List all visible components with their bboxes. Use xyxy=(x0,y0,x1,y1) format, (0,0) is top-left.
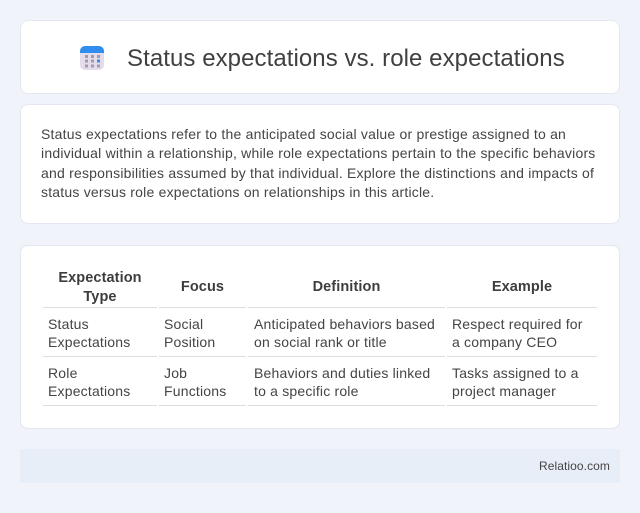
table row: status expectations: Status xyxy=(48,316,89,332)
footer text: Relatioo.com xyxy=(539,459,610,473)
table row: status expectations: Social xyxy=(164,316,203,332)
table row: role expectations: Behaviors and duties linked xyxy=(254,365,430,381)
panel: title xyxy=(20,20,620,94)
panel: comparison table xyxy=(20,245,620,429)
table row: status expectations xyxy=(48,316,583,350)
table row: role expectations: project manager xyxy=(452,383,556,399)
table row: status expectations: a company CEO xyxy=(452,334,557,350)
footer bar xyxy=(20,449,620,483)
table row: role expectations: to a specific role xyxy=(254,383,359,399)
table row: role expectations: Functions xyxy=(164,383,226,399)
description text: status versus role expectations on relationships in this article. xyxy=(41,184,434,200)
table header: Expectation xyxy=(58,270,142,286)
table row: role expectations: Tasks assigned to a xyxy=(452,365,579,381)
table row: role expectations: Role xyxy=(48,365,78,381)
table header: Example xyxy=(492,279,552,295)
table row: status expectations: Respect required for xyxy=(452,316,583,332)
description text: and responsibilities assumed by that individual. Explore the distinctions and impacts of xyxy=(41,165,594,181)
panel: description xyxy=(20,104,620,224)
table row: status expectations: on social rank or title xyxy=(254,334,387,350)
table row: role expectations xyxy=(48,365,579,399)
description text: Status expectations refer to the anticipated social value or prestige assigned to an xyxy=(41,126,566,142)
table header: Type xyxy=(83,289,117,305)
table row: role expectations: Job xyxy=(164,365,187,381)
table header: Definition xyxy=(313,279,380,295)
table row: role expectations: Expectations xyxy=(48,383,130,399)
description text xyxy=(41,126,596,200)
description text: individual within a relationship, while role expectations pertain to the specific behaviors xyxy=(41,145,596,161)
heading: Status expectations vs. role expectations xyxy=(127,45,565,72)
table header xyxy=(58,270,552,305)
table row: status expectations: Expectations xyxy=(48,334,130,350)
table header: Focus xyxy=(181,279,224,295)
table row: status expectations: Anticipated behaviors based xyxy=(254,316,435,332)
table row: status expectations: Position xyxy=(164,334,215,350)
icon: calendar xyxy=(80,46,104,70)
